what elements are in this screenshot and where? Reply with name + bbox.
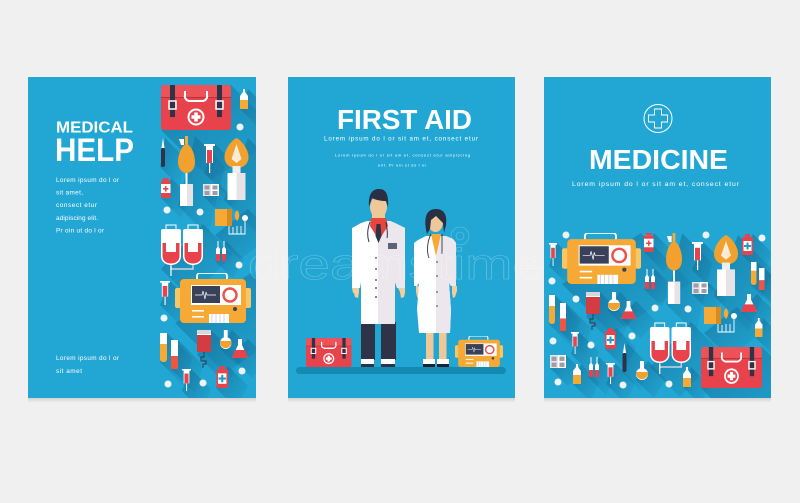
panel: first aid: [288, 77, 515, 403]
icon: test tube red: [171, 340, 178, 369]
text block: intro: [56, 177, 120, 234]
icon: cross bottle: [742, 234, 753, 255]
icon: scalpel: [161, 138, 165, 167]
icon: defibrillator: [562, 233, 641, 284]
icon: cross bottle: [605, 328, 616, 349]
icon: bottle: [683, 367, 691, 387]
icon: defibrillator: [175, 273, 251, 323]
icon column: medical supplies: [160, 85, 256, 398]
icon: test tube yellow: [160, 333, 167, 362]
text block: intro: adipiscing elit.: [56, 215, 98, 222]
icon: resuscitator bag: [178, 136, 195, 206]
icon: cross bottle: [216, 366, 228, 388]
icon: blister pack: [550, 355, 566, 368]
icon: syringe: [160, 281, 170, 305]
icon: bottle: [240, 89, 248, 109]
icon: conical flask: [232, 339, 248, 358]
icon: test tube yellow: [549, 295, 555, 324]
ground: [296, 367, 506, 374]
watermark: dreamstime: [248, 240, 544, 289]
icon grid: medical supplies: [548, 232, 771, 398]
icon: cross in circle: [644, 104, 672, 132]
icon: drip pack: [586, 292, 600, 330]
icon: first aid kit: [306, 338, 352, 367]
icon: drip pack: [197, 330, 211, 368]
icon: ampoules: [216, 241, 226, 261]
text block: small description: [335, 152, 470, 168]
text block: subtitle: Lorem ipsum do l or sit am et, consect etur: [572, 181, 740, 188]
figure: female doctor: [414, 209, 457, 367]
icon: medicine bottle: [161, 178, 170, 198]
icon: scalpel: [622, 343, 626, 372]
icon: syringe: [606, 363, 615, 384]
icon: blood bags: [650, 323, 691, 374]
text block: intro: sit amet,: [56, 190, 83, 196]
icon: blood pressure cuff: [704, 307, 737, 332]
icon: round flask: [636, 361, 648, 380]
icon: round flask: [220, 330, 232, 349]
icons: pills: [160, 124, 246, 388]
text block: subtitle: Lorem ipsum do l or sit am et, consect etur: [324, 136, 478, 142]
icon: ampoules: [589, 357, 599, 377]
text block: intro: Lorem ipsum do l or: [56, 177, 120, 184]
text block: small description: elit. Pr oin ut do l or: [378, 162, 427, 168]
icon: blood bags: [161, 225, 203, 276]
panel: medical help: [28, 77, 256, 402]
heading: first aid: FIRST AID: [337, 104, 472, 135]
icon: syringe: [571, 332, 579, 354]
text block: footer: [56, 355, 120, 375]
icons: pills: [548, 232, 766, 388]
icon: test tube yellow: [751, 262, 756, 285]
icon: test tube red: [560, 303, 566, 331]
panel: medicine: [544, 77, 771, 402]
icon: syringe: [182, 369, 191, 391]
icon: syringe: [204, 144, 215, 173]
icon: test tube red: [759, 268, 764, 290]
watermark: [248, 227, 544, 289]
icon: blister pack: [203, 184, 219, 196]
icon: resuscitator bag: [666, 233, 682, 304]
text block: intro: Pr oin ut do l or: [56, 228, 105, 234]
icon: round flask: [608, 292, 620, 311]
icon: blood pressure cuff: [215, 209, 248, 234]
text block: footer: sit amet: [56, 368, 82, 375]
icon: blister pack: [692, 282, 708, 294]
icon: defibrillator: [455, 336, 503, 367]
icon: conical flask: [621, 301, 636, 319]
text block: small description: Lorem ipsum do l or sit am et, consect etur adipiscing: [335, 152, 470, 158]
icon: conical flask: [741, 294, 757, 312]
text block: footer: Lorem ipsum do l or: [56, 355, 120, 362]
icon: bottle: [755, 318, 762, 337]
heading: medicine: MEDICINE: [589, 144, 728, 175]
icon: bottle: [573, 364, 581, 384]
heading: medical help: HELP: [55, 132, 134, 168]
icon: medicine bottle: [644, 233, 654, 252]
icon: oxygen mask: [714, 235, 738, 296]
text block: intro: consect etur: [56, 202, 98, 209]
icon: first aid kit: [701, 347, 762, 388]
icon: ampoules: [645, 269, 655, 289]
figure: male doctor: [352, 189, 405, 367]
icon: oxygen mask: [224, 138, 248, 200]
icon: syringe: [692, 242, 703, 270]
icon: syringe: [549, 243, 557, 266]
icon: first aid kit: [161, 85, 231, 130]
heading: medical help: MEDICAL: [56, 120, 133, 136]
